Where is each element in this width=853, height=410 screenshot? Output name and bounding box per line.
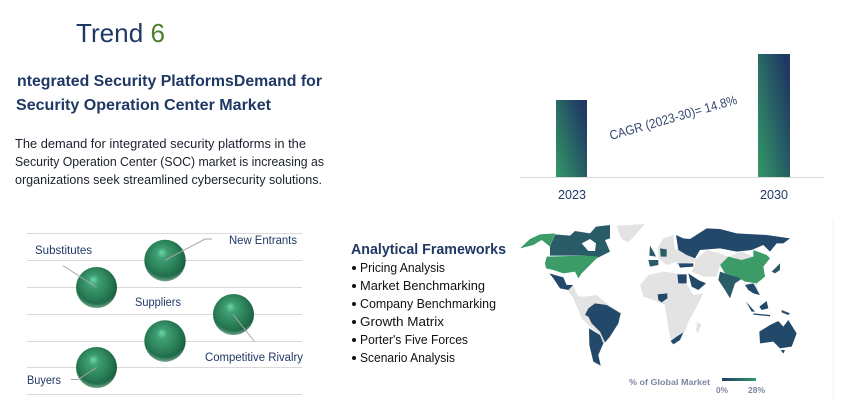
heading (16, 73, 322, 114)
Hudson Bay cut-out (582, 239, 596, 251)
title: Trend 6 (76, 18, 165, 48)
label: buyers: Buyers (27, 375, 61, 387)
five forces diagram (27, 234, 303, 394)
heading: ntegrated Security PlatformsDemand for (17, 73, 322, 90)
bar: 2030 (758, 54, 790, 177)
list items: Scenario Analysis (360, 350, 455, 365)
list items: Pricing Analysis (360, 260, 445, 275)
description text (15, 137, 324, 187)
label: new entrants: New Entrants (229, 235, 297, 247)
sphere: suppliers (144, 320, 186, 362)
sphere: buyers (76, 347, 117, 388)
label: 2023: 2023 (558, 187, 586, 202)
sphere: competitive rivalry (213, 294, 254, 335)
bar: 2023 (556, 100, 587, 177)
connectors (63, 239, 254, 380)
navy countries (549, 228, 797, 366)
legend max: 28% (748, 385, 765, 395)
label: competitive rivalry: Competitive Rivalry (205, 352, 303, 364)
grey land (567, 224, 758, 345)
description text: The demand for integrated security platforms in the (15, 137, 306, 151)
sphere: new entrants (144, 240, 186, 281)
analytical frameworks list (351, 242, 506, 365)
list items: Porter's Five Forces (360, 332, 468, 347)
label: suppliers: Suppliers (135, 297, 181, 309)
description text: organizations seek streamlined cybersecurity solutions. (15, 173, 322, 187)
list heading: Analytical Frameworks (351, 242, 506, 258)
legend gradient bar (722, 378, 756, 381)
bar chart (520, 54, 824, 202)
list items: Company Benchmarking (360, 296, 496, 311)
CAGR label: CAGR (2023-30)= 14.8% (608, 92, 739, 143)
world map (520, 224, 797, 366)
legend title: % of Global Market (629, 377, 710, 387)
green countries (520, 233, 770, 283)
list items: Market Benchmarking (360, 278, 485, 293)
map separator (832, 218, 834, 400)
map legend (629, 377, 765, 395)
dark teal countries (550, 225, 780, 298)
label: 2030: 2030 (760, 187, 788, 202)
heading: Security Operation Center Market (16, 97, 272, 114)
sphere: substitutes (76, 267, 117, 308)
label: substitutes: Substitutes (35, 245, 92, 257)
description text: Security Operation Center (SOC) market is increasing as (15, 155, 324, 169)
list items: Growth Matrix (360, 314, 445, 329)
list items (352, 260, 496, 365)
legend min: 0% (716, 385, 728, 395)
